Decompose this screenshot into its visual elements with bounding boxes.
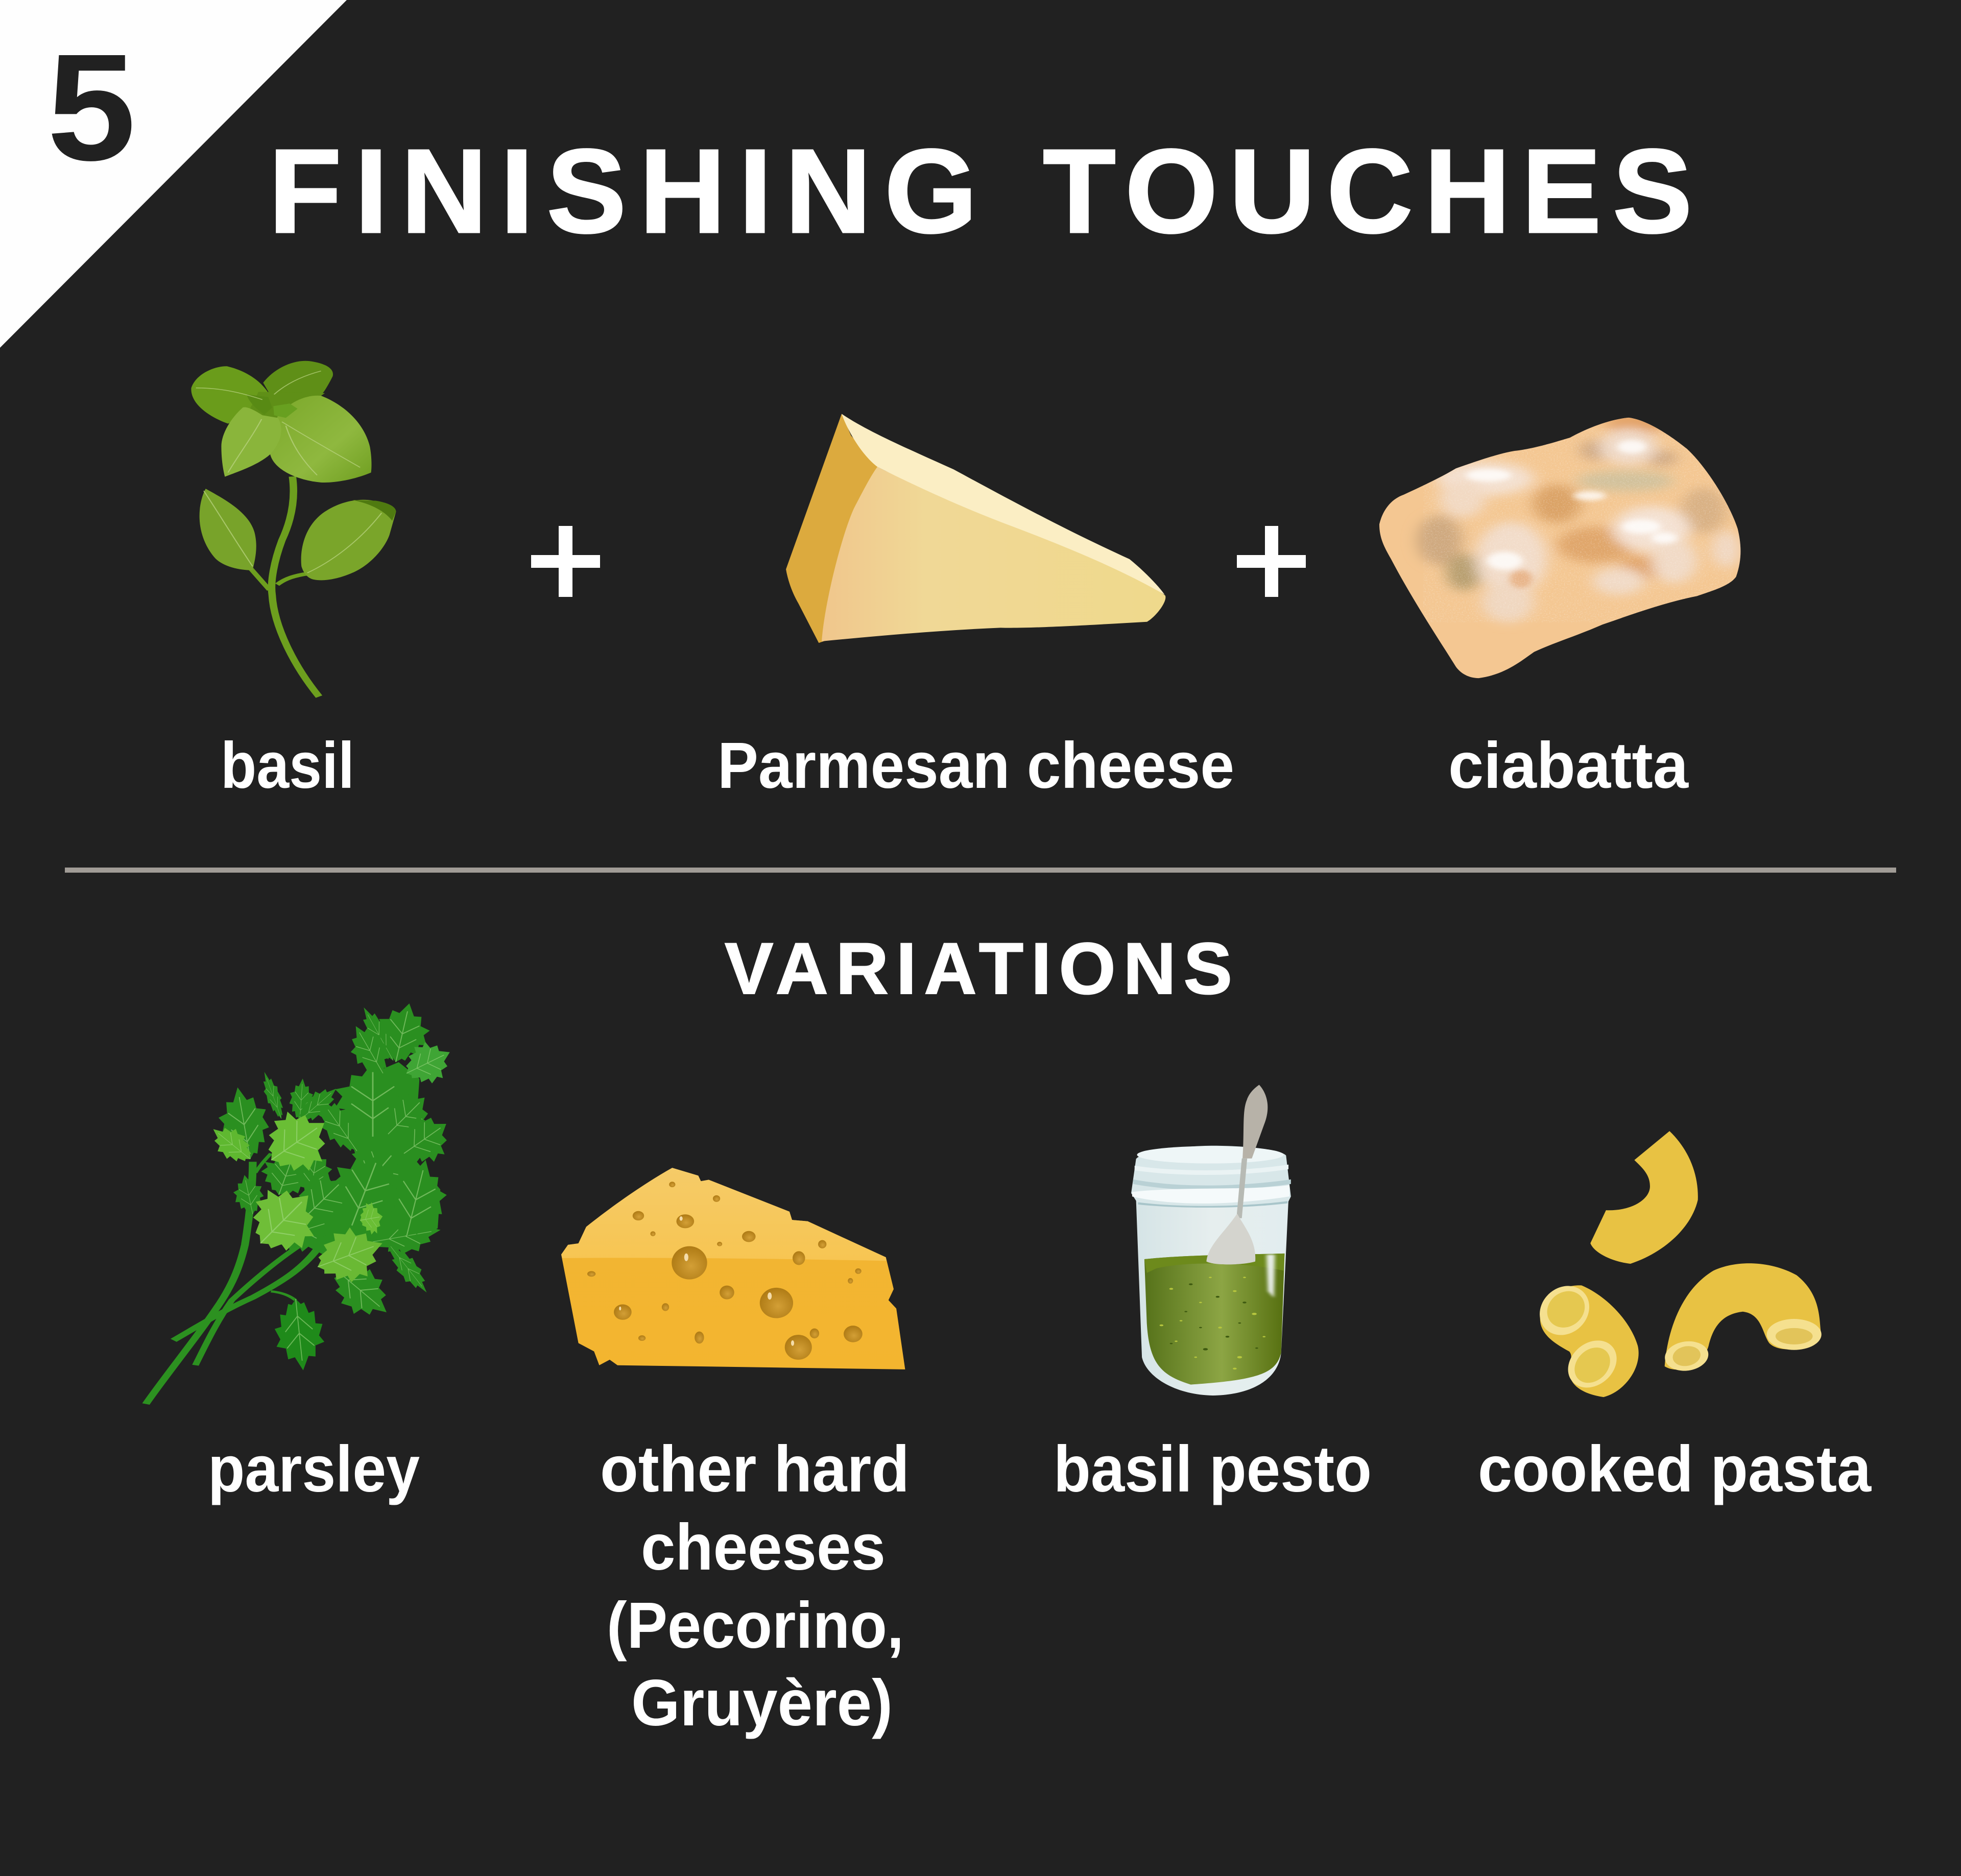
label: other hard cheeses (Pecorino, Gruyère): cheeses [641,1511,886,1584]
panel: variations [146,928,1872,1740]
icon: basil sprig [191,361,396,696]
plus sign [1237,526,1306,597]
label: basil: basil [221,729,354,802]
heading: variations: VARIATIONS [725,928,1232,1009]
label: cooked pasta: cooked pasta [1478,1433,1872,1506]
icon: hard cheese wedge [561,1168,905,1369]
label: basil pesto: basil pesto [1054,1433,1372,1506]
label: ciabatta: ciabatta [1448,729,1689,802]
icon: ciabatta bread [1379,413,1741,678]
label: other hard cheeses (Pecorino, Gruyère): (Pecorino, [607,1589,904,1662]
plus sign [531,526,600,597]
label: parsley: parsley [208,1433,420,1506]
icon: parsley bunch [146,998,460,1404]
step number corner badge: 5 [47,22,136,193]
panel: main finishing touches [191,361,1741,802]
icon: cooked macaroni pasta [1536,1131,1822,1397]
label: Parmesan cheese: Parmesan cheese [718,729,1234,802]
label: other hard cheeses (Pecorino, Gruyère): other hard [600,1433,910,1506]
label: other hard cheeses (Pecorino, Gruyère) [600,1433,910,1740]
label: other hard cheeses (Pecorino, Gruyère): Gruyère) [631,1667,893,1740]
title: FINISHING [269,124,990,258]
step number corner badge [0,0,347,348]
icon: Parmesan cheese wedge [786,414,1165,643]
icon: basil pesto jar [1131,1085,1291,1396]
title: TOUCHES [1043,124,1704,258]
